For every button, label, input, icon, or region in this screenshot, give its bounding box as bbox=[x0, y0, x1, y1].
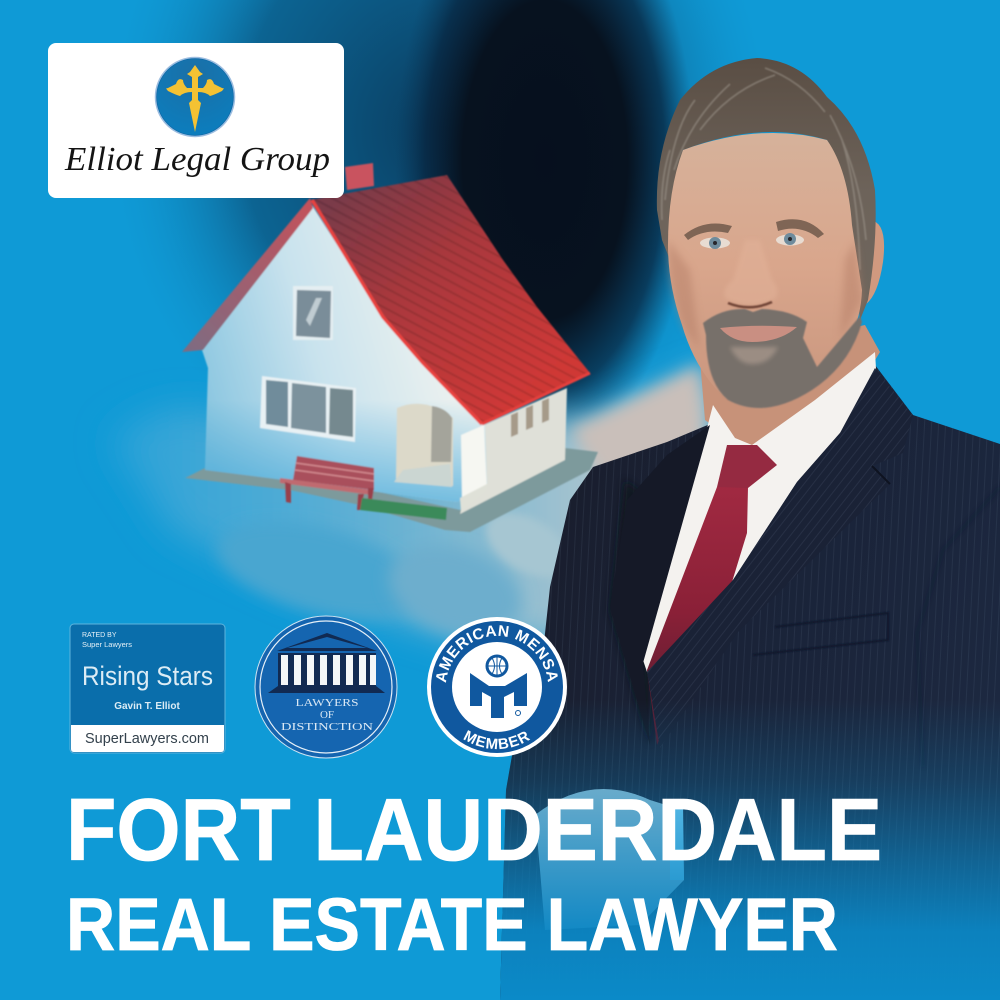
face bbox=[668, 133, 862, 408]
eyebrows bbox=[684, 219, 824, 240]
badge: Lawyers of Distinction: LAWYERS bbox=[296, 697, 358, 709]
front wall bbox=[202, 205, 487, 502]
side wall bbox=[460, 388, 567, 514]
shirt cuff bbox=[670, 803, 684, 880]
porch bbox=[394, 404, 488, 512]
logo panel bbox=[48, 43, 344, 198]
suit jacket bbox=[500, 365, 1000, 1000]
hand under the house bbox=[110, 365, 720, 650]
red tie bbox=[647, 445, 777, 745]
right lapel bbox=[647, 368, 913, 748]
house base and grass bbox=[185, 448, 598, 532]
hair bbox=[657, 58, 876, 320]
left lapel bbox=[610, 425, 710, 745]
badge: Lawyers of Distinction: DISTINCTION bbox=[281, 721, 373, 733]
badge: American Mensa Member: AMERICAN MENSA bbox=[436, 625, 558, 683]
red roof bbox=[310, 175, 590, 424]
badge: Super Lawyers Rising Stars: RATED BY bbox=[82, 632, 117, 639]
mouth bbox=[720, 326, 797, 342]
right ear bbox=[866, 220, 884, 304]
photo of attorney bbox=[490, 58, 1000, 1000]
clasped hand bbox=[535, 789, 684, 930]
badge: American Mensa Member: MEMBER bbox=[463, 730, 530, 750]
green fence bbox=[360, 498, 447, 520]
headline: FORT LAUDERDALE bbox=[66, 780, 882, 879]
bench bbox=[280, 456, 374, 510]
badge: Super Lawyers Rising Stars: Rising Stars bbox=[82, 661, 213, 691]
upper window bbox=[293, 286, 333, 340]
neck bbox=[700, 325, 880, 455]
logo disc with gold cross bbox=[156, 58, 234, 136]
logo wordmark: Elliot Legal Group bbox=[64, 141, 330, 178]
shirt bbox=[643, 352, 877, 672]
headline bbox=[66, 780, 882, 966]
badge: Super Lawyers Rising Stars: SuperLawyers.com bbox=[85, 730, 209, 747]
jacket pocket bbox=[753, 613, 888, 655]
badge: Super Lawyers Rising Stars: Gavin T. Elliot bbox=[114, 701, 180, 712]
nose bbox=[724, 240, 777, 305]
badge: Super Lawyers Rising Stars bbox=[70, 624, 225, 753]
headline: REAL ESTATE LAWYER bbox=[66, 883, 838, 966]
eyes bbox=[700, 233, 804, 249]
goatee and stubble bbox=[703, 309, 862, 408]
badge: American Mensa Member bbox=[427, 617, 567, 757]
badge: Lawyers of Distinction: OF bbox=[320, 709, 334, 721]
house model bbox=[182, 163, 598, 532]
chimney bbox=[345, 163, 374, 190]
bottom fade over suit bbox=[490, 700, 1000, 1000]
gable trim bbox=[182, 198, 313, 352]
badge: Lawyers of Distinction bbox=[255, 616, 397, 758]
badge: Super Lawyers Rising Stars: Super Lawyers bbox=[82, 640, 132, 649]
lower windows bbox=[260, 376, 356, 442]
